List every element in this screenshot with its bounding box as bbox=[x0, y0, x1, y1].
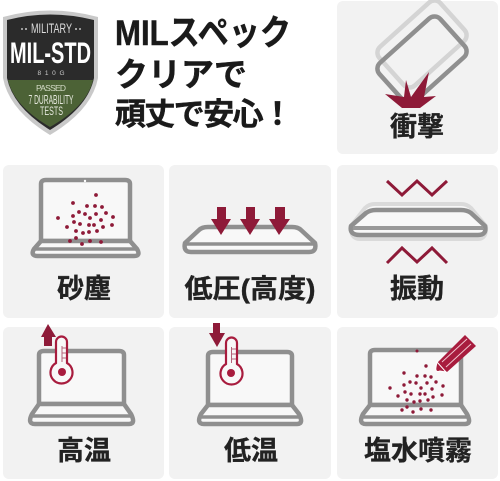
icon: laptop under pressure arrows bbox=[185, 207, 315, 252]
badge: MIL-STD shield: TESTS bbox=[40, 106, 63, 118]
badge: MIL-STD shield: PASSED bbox=[36, 83, 66, 93]
icon: spray bottle bbox=[436, 335, 476, 372]
icon: vibrating laptop bbox=[351, 181, 486, 263]
label: vibration: 振動 bbox=[390, 274, 444, 304]
title: MILスペック bbox=[115, 14, 291, 53]
label: dust: 砂塵 bbox=[57, 274, 111, 304]
panel: dust bbox=[3, 165, 164, 318]
panel: salt fog bbox=[337, 327, 498, 479]
badge: MIL-STD shield bbox=[3, 10, 98, 135]
panel: low pressure bbox=[169, 165, 331, 318]
icon: laptop with salt spray bbox=[361, 335, 476, 424]
icon: laptop with rising thermometer bbox=[30, 324, 133, 424]
icon: laptop with dust bbox=[33, 180, 138, 256]
icon: laptop with falling thermometer bbox=[199, 323, 301, 424]
label: high temperature: 高温 bbox=[57, 436, 111, 466]
title: 頑丈で安心！ bbox=[115, 97, 293, 132]
label: impact: 衝撃 bbox=[390, 112, 444, 142]
badge: MIL-STD shield: 810G bbox=[38, 70, 64, 77]
label: low pressure: 低圧(高度) bbox=[184, 274, 316, 304]
badge: MIL-STD shield: 7 DURABILITY bbox=[28, 92, 74, 107]
icon: dropped laptop bbox=[374, 0, 470, 108]
title bbox=[115, 14, 293, 132]
badge: MIL-STD shield: MIL-STD bbox=[10, 37, 91, 70]
panel: impact bbox=[337, 0, 498, 154]
panel: high temperature bbox=[3, 324, 164, 479]
title: クリアで bbox=[115, 56, 247, 93]
badge: MIL-STD shield: MILITARY bbox=[31, 21, 72, 36]
label: low temperature: 低温 bbox=[224, 436, 278, 466]
label: salt fog: 塩水噴霧 bbox=[364, 436, 472, 466]
panel: low temperature bbox=[169, 323, 331, 479]
panel: vibration bbox=[337, 165, 498, 318]
